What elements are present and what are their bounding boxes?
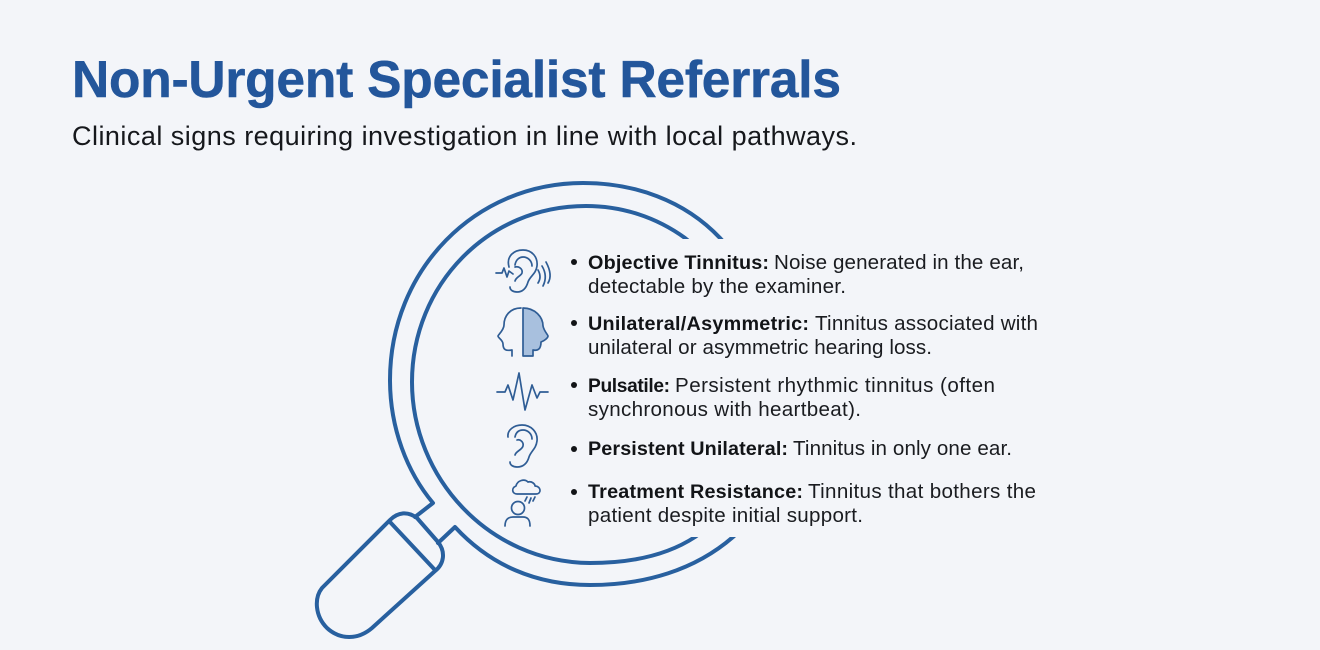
title: Non-Urgent Specialist Referrals — [72, 50, 841, 108]
label: Treatment Resistance: — [588, 481, 803, 503]
label: Unilateral/Asymmetric: — [588, 313, 809, 335]
handle collar line — [390, 522, 435, 570]
bullet — [571, 259, 577, 265]
description line 2: detectable by the examiner. — [588, 275, 846, 298]
label: Pulsatile: — [588, 376, 670, 397]
description: Tinnitus in only one ear. — [793, 437, 1012, 460]
description: Noise generated in the ear, — [774, 251, 1024, 274]
icon: pulse waveform — [497, 373, 548, 410]
description line 2: patient despite initial support. — [588, 504, 863, 527]
subtitle: Clinical signs requiring investigation in line with local pathways. — [72, 121, 857, 151]
description: Tinnitus associated with — [815, 312, 1038, 335]
bullet — [571, 489, 577, 495]
label: Persistent Unilateral: — [588, 438, 788, 460]
description line 2: unilateral or asymmetric hearing loss. — [588, 336, 932, 359]
bullet — [571, 320, 577, 326]
lens lower outer rim — [438, 527, 743, 585]
description line 2: synchronous with heartbeat). — [588, 398, 861, 421]
list item: persistent unilateral — [508, 425, 1012, 467]
description: Persistent rhythmic tinnitus (often — [675, 374, 995, 397]
bullet — [571, 382, 577, 388]
lens inner rim — [412, 206, 706, 563]
bullet — [571, 446, 577, 452]
icon: magnifying glass — [317, 183, 743, 637]
list item: unilateral or asymmetric — [498, 308, 1038, 359]
icon: split head — [498, 308, 548, 356]
list item: pulsatile — [497, 373, 995, 421]
icon: person under rain cloud — [505, 480, 540, 526]
label: Objective Tinnitus: — [588, 252, 769, 274]
list item: objective tinnitus — [496, 250, 1024, 298]
list item: treatment resistance — [505, 480, 1036, 527]
lens outer rim — [390, 183, 730, 517]
description: Tinnitus that bothers the — [808, 480, 1036, 503]
icon: ear with sound waves — [496, 250, 550, 292]
icon: ear — [508, 425, 537, 467]
handle — [317, 513, 443, 637]
